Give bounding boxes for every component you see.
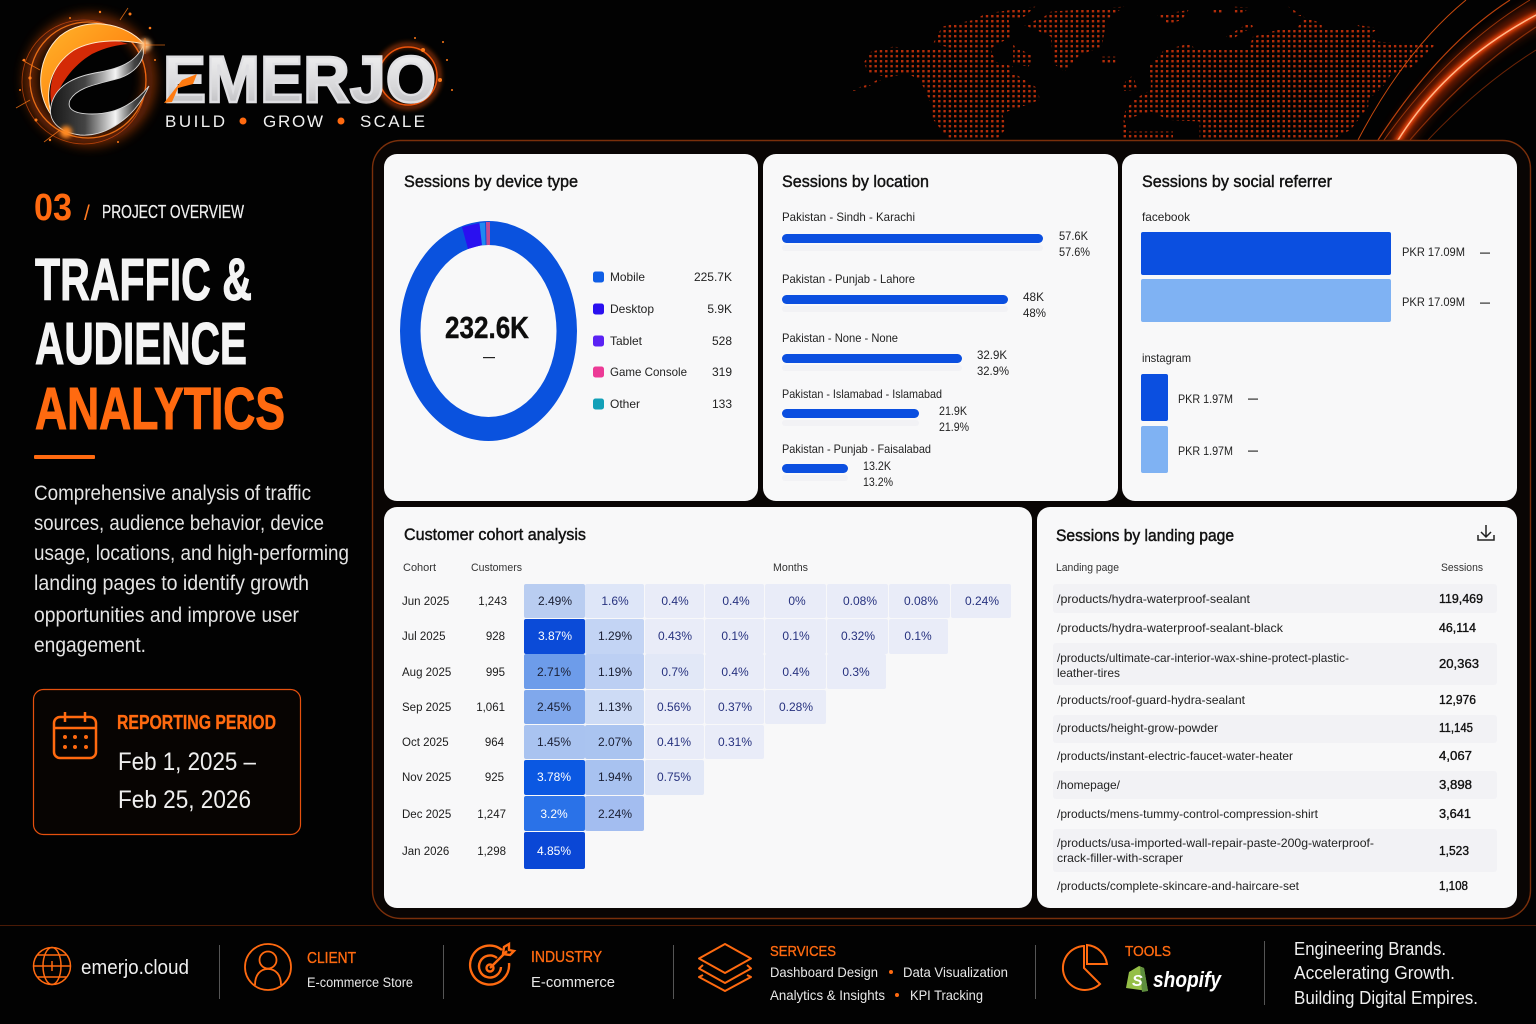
- heatmap values: 0.41%: [657, 735, 691, 749]
- landing page rows: leather-tires: [1057, 666, 1120, 680]
- heading: Sessions by landing page: [1056, 526, 1234, 545]
- legend: [593, 270, 732, 411]
- cohort labels: 1,243: [478, 596, 507, 608]
- landing page rows: /products/roof-guard-hydra-sealant: [1057, 693, 1246, 707]
- instagram bars: PKR 1.97M: [1178, 392, 1233, 406]
- cohort labels: 928: [486, 631, 505, 643]
- intro paragraph: sources, audience behavior, device: [34, 512, 324, 535]
- icon: globe: [34, 948, 70, 984]
- reporting period box: Feb 25, 2026: [118, 786, 251, 814]
- cohort labels: Aug 2025: [402, 667, 451, 679]
- landing page rows: /products/complete-skincare-and-haircare-set: [1057, 879, 1300, 893]
- legend: Desktop: [610, 302, 654, 316]
- icon: client person: [245, 944, 291, 990]
- heatmap values: 0.4%: [661, 594, 689, 608]
- location bars: 48%: [1023, 306, 1046, 320]
- heatmap values: 0.24%: [965, 594, 999, 608]
- shopify logo: S: [1132, 973, 1143, 990]
- heatmap values: 3.78%: [537, 770, 571, 784]
- heatmap values: 2.49%: [538, 594, 572, 608]
- section number: /: [84, 202, 90, 225]
- reporting period box: [34, 690, 300, 834]
- section number: [34, 187, 244, 229]
- heatmap cells: [524, 584, 1011, 869]
- legend: 528: [712, 334, 732, 348]
- footer bar: [0, 925, 1536, 1024]
- heatmap values: 0.08%: [904, 594, 938, 608]
- panel: sessions by landing page: [1037, 507, 1517, 908]
- heatmap values: 0.08%: [843, 594, 877, 608]
- landing page rows: 3,898: [1439, 778, 1472, 792]
- location bars: 21.9%: [939, 420, 969, 434]
- landing page rows: /products/instant-electric-faucet-water-heater: [1057, 749, 1293, 763]
- panel: sessions by social referrer: [1122, 154, 1517, 501]
- services info: Analytics & Insights: [770, 987, 885, 1003]
- heatmap values: 2.24%: [598, 807, 632, 821]
- services info: [770, 943, 1008, 1003]
- heatmap values: 1.29%: [598, 629, 632, 643]
- heatmap values: 1.45%: [537, 735, 571, 749]
- facebook bars: facebook: [1142, 210, 1191, 224]
- table header: Landing page: [1056, 562, 1119, 574]
- heatmap values: 3.2%: [540, 807, 568, 821]
- website: emerjo.cloud: [81, 957, 189, 979]
- cohort labels: 1,061: [476, 702, 505, 714]
- cohort labels: Oct 2025: [402, 737, 449, 749]
- title: TRAFFIC &: [35, 247, 252, 313]
- tagline: GROW: [263, 112, 323, 131]
- services info: KPI Tracking: [910, 987, 983, 1003]
- heatmap values: 0.75%: [657, 770, 691, 784]
- legend: Game Console: [610, 365, 687, 379]
- instagram bars: instagram: [1142, 351, 1191, 365]
- legend: 5.9K: [707, 302, 732, 316]
- location bars: Pakistan - Punjab - Lahore: [782, 272, 915, 286]
- location bars: Pakistan - None - None: [782, 331, 898, 345]
- instagram bars: [1141, 351, 1258, 473]
- world map dots: [840, 0, 1440, 140]
- instagram bars: PKR 1.97M: [1178, 444, 1233, 458]
- table header: Customers: [471, 562, 522, 574]
- cohort labels: [402, 596, 507, 858]
- icon: swirl E emblem: [16, 8, 165, 144]
- tagline: [165, 112, 425, 131]
- heading: Sessions by location: [782, 172, 929, 191]
- shopify logo: [1126, 966, 1223, 992]
- landing page rows: 11,145: [1439, 721, 1473, 735]
- tagline: SCALE: [360, 112, 425, 131]
- panel: customer cohort analysis: [384, 507, 1032, 908]
- landing page rows: 3,641: [1439, 807, 1471, 821]
- table header: Months: [773, 562, 808, 574]
- dashboard frame: [372, 140, 1530, 918]
- intro paragraph: usage, locations, and high-performing: [34, 542, 349, 565]
- heatmap values: 0.56%: [657, 700, 691, 714]
- heatmap values: 0.4%: [722, 594, 750, 608]
- cohort labels: Jun 2025: [402, 596, 449, 608]
- icon: download: [1478, 525, 1494, 540]
- landing page rows: /homepage/: [1057, 778, 1121, 792]
- landing page rows: /products/hydra-waterproof-sealant-black: [1057, 621, 1284, 635]
- landing page rows: /products/usa-imported-wall-repair-paste-200g-waterproof-: [1057, 836, 1374, 850]
- heatmap values: 0.31%: [718, 735, 752, 749]
- heatmap values: 4.85%: [537, 844, 571, 858]
- icon: layers: [699, 944, 751, 991]
- location bars: Pakistan - Sindh - Karachi: [782, 210, 915, 224]
- intro paragraph: engagement.: [34, 634, 146, 657]
- table header: [403, 562, 808, 574]
- location bars: 57.6%: [1059, 245, 1090, 259]
- section number: 03: [34, 187, 72, 229]
- landing page rows: crack-filler-with-scraper: [1057, 851, 1183, 865]
- heatmap values: 3.87%: [538, 629, 572, 643]
- icon: pie chart: [1063, 945, 1107, 990]
- cohort labels: Jul 2025: [402, 631, 445, 643]
- landing page rows: 1,108: [1439, 879, 1468, 893]
- heatmap values: 1.94%: [598, 770, 632, 784]
- cohort labels: 1,247: [477, 809, 506, 821]
- donut chart: [400, 221, 577, 441]
- title: AUDIENCE: [35, 311, 247, 377]
- legend: Mobile: [610, 270, 645, 284]
- heatmap values: 0.1%: [782, 629, 810, 643]
- intro paragraph: opportunities and improve user: [34, 604, 299, 627]
- intro paragraph: [34, 482, 349, 657]
- table header: Sessions: [1441, 562, 1483, 574]
- client info: E-commerce Store: [307, 975, 413, 990]
- facebook bars: PKR 17.09M: [1402, 245, 1465, 259]
- location bars: 21.9K: [939, 404, 967, 418]
- heatmap values: 1.13%: [598, 700, 632, 714]
- services info: Dashboard Design: [770, 964, 878, 980]
- cohort labels: Sep 2025: [402, 702, 451, 714]
- title: [35, 247, 285, 442]
- icon: E slash accent: [164, 74, 197, 103]
- services info: SERVICES: [770, 943, 836, 960]
- location bars: 13.2K: [863, 459, 891, 473]
- landing page rows: /products/hydra-waterproof-sealant: [1057, 592, 1251, 606]
- heatmap values: 0.1%: [904, 629, 932, 643]
- heatmap values: 0.32%: [841, 629, 875, 643]
- heading: Customer cohort analysis: [404, 525, 586, 544]
- landing page rows: /products/mens-tummy-control-compression-shirt: [1057, 807, 1319, 821]
- location bars: 32.9%: [977, 364, 1009, 378]
- landing page rows: [1057, 592, 1483, 893]
- location bars: 57.6K: [1059, 229, 1088, 243]
- facebook bars: [1141, 210, 1490, 322]
- heatmap values: 2.45%: [537, 700, 571, 714]
- legend: Other: [610, 397, 640, 411]
- location bars: 13.2%: [863, 475, 893, 489]
- cohort labels: 925: [485, 772, 504, 784]
- closing tagline: Accelerating Growth.: [1294, 963, 1455, 983]
- heatmap values: [537, 594, 999, 858]
- glowing orange arcs: [1358, 0, 1536, 145]
- heatmap values: 0.3%: [842, 665, 870, 679]
- landing page rows: 12,976: [1439, 693, 1476, 707]
- title underline: [34, 455, 95, 459]
- landing page rows: 46,114: [1439, 621, 1476, 635]
- landing page rows: /products/ultimate-car-interior-wax-shine-protect-plastic-: [1057, 651, 1349, 665]
- tagline: BUILD: [165, 112, 225, 131]
- landing page rows: /products/height-grow-powder: [1057, 721, 1218, 735]
- table header: [1056, 562, 1483, 574]
- closing tagline: Engineering Brands.: [1294, 939, 1446, 959]
- panel: sessions by location: [763, 154, 1118, 501]
- industry info: INDUSTRY: [531, 949, 602, 966]
- location bars: Pakistan - Punjab - Faisalabad: [782, 442, 931, 456]
- legend: Tablet: [610, 334, 643, 348]
- title: ANALYTICS: [35, 376, 285, 442]
- landing page rows: 4,067: [1439, 749, 1472, 763]
- row shading: [1053, 584, 1497, 872]
- heatmap values: 0.43%: [658, 629, 692, 643]
- closing tagline: [1294, 939, 1478, 1008]
- section number: PROJECT OVERVIEW: [102, 202, 244, 222]
- industry info: E-commerce: [531, 974, 615, 991]
- heatmap values: 0.4%: [721, 665, 749, 679]
- reporting period box: REPORTING PERIOD: [117, 712, 276, 734]
- cohort labels: 995: [486, 667, 505, 679]
- donut chart: 232.6K: [445, 310, 530, 345]
- wordmark ring glow: [377, 37, 453, 107]
- heatmap values: 2.07%: [598, 735, 632, 749]
- location bars: 48K: [1023, 290, 1044, 304]
- cohort labels: 964: [485, 737, 505, 749]
- icon: calendar: [54, 712, 96, 758]
- closing tagline: Building Digital Empires.: [1294, 988, 1478, 1008]
- heatmap values: 1.19%: [598, 665, 632, 679]
- heatmap values: 0.37%: [718, 700, 752, 714]
- heatmap values: 0.1%: [721, 629, 749, 643]
- facebook bars: PKR 17.09M: [1402, 295, 1465, 309]
- heatmap values: 0%: [788, 594, 806, 608]
- heatmap values: 2.71%: [537, 665, 571, 679]
- tools label: TOOLS: [1125, 943, 1171, 960]
- cohort labels: Dec 2025: [402, 809, 451, 821]
- location bars: Pakistan - Islamabad - Islamabad: [782, 387, 942, 401]
- intro paragraph: landing pages to identify growth: [34, 572, 309, 595]
- heading: Sessions by device type: [404, 172, 578, 191]
- cohort labels: 1,298: [477, 846, 506, 858]
- heading: Sessions by social referrer: [1142, 172, 1332, 191]
- heatmap values: 0.7%: [661, 665, 689, 679]
- reporting period box: Feb 1, 2025 –: [118, 748, 256, 776]
- icon: target: [470, 944, 514, 985]
- cohort labels: Nov 2025: [402, 772, 451, 784]
- location bars: [782, 210, 1090, 489]
- landing page rows: 119,469: [1439, 592, 1483, 606]
- legend: 225.7K: [694, 270, 732, 284]
- industry info: [531, 949, 615, 991]
- cohort labels: Jan 2026: [402, 846, 449, 858]
- location bars: 32.9K: [977, 348, 1007, 362]
- heatmap values: 0.4%: [782, 665, 810, 679]
- landing page rows: 20,363: [1439, 657, 1479, 671]
- wordmark: EMERJO: [163, 42, 436, 116]
- panel: sessions by device type: [384, 154, 758, 501]
- client info: CLIENT: [307, 950, 356, 967]
- landing page rows: 1,523: [1439, 844, 1469, 858]
- shopify logo: shopify: [1153, 967, 1223, 992]
- intro paragraph: Comprehensive analysis of traffic: [34, 482, 311, 505]
- table header: Cohort: [403, 562, 436, 574]
- logo: Emerjo: [16, 8, 453, 144]
- services info: Data Visualization: [903, 964, 1008, 980]
- legend: 319: [712, 365, 732, 379]
- heatmap values: 0.28%: [779, 700, 813, 714]
- heatmap values: 1.6%: [601, 594, 629, 608]
- client info: [307, 950, 413, 990]
- legend: 133: [712, 397, 732, 411]
